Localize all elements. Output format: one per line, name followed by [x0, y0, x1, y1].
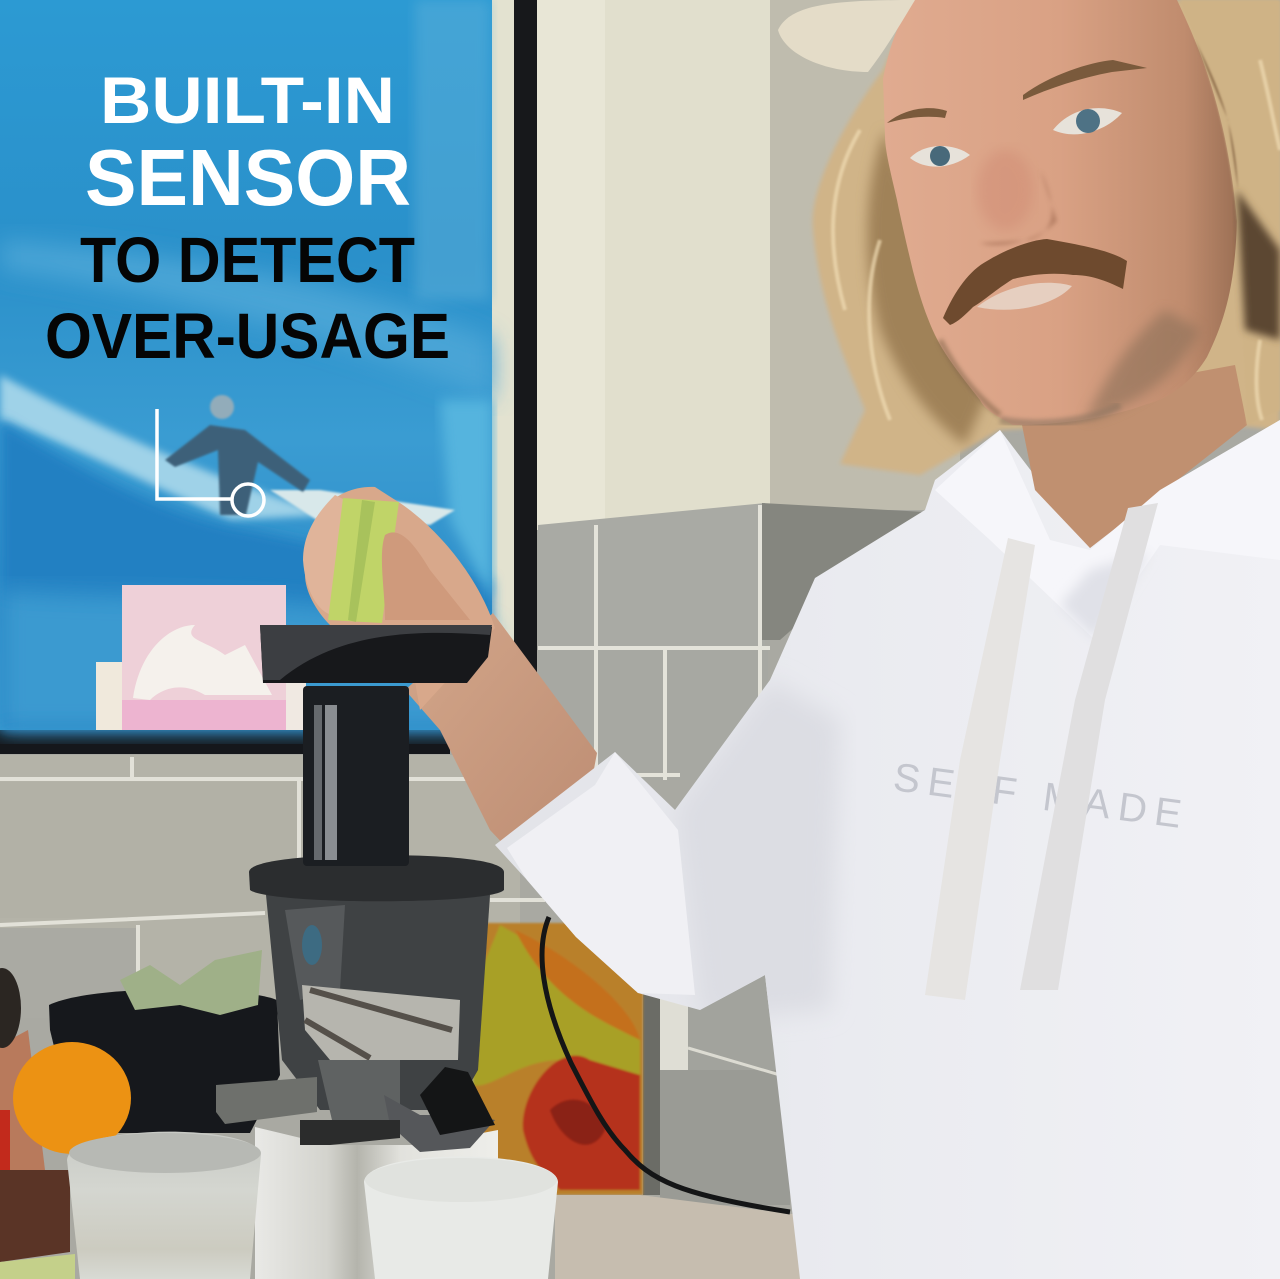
eyes [910, 146, 970, 167]
title text [45, 63, 450, 372]
hoodie body [495, 420, 1280, 1279]
neck [1018, 365, 1247, 548]
title text: OVER-USAGE [45, 300, 450, 372]
drawstrings [925, 538, 1035, 1000]
counter items: plant, fruit, painting [0, 923, 800, 1279]
sleeve shading [684, 692, 837, 1012]
title text: BUILT-IN [100, 63, 395, 137]
hoodie text: SELF MADE [891, 755, 1184, 837]
hair back [813, 0, 1280, 475]
countertop [555, 1195, 800, 1279]
pulp cap [420, 1067, 495, 1135]
surfer [165, 395, 310, 515]
title text: SENSOR [85, 133, 411, 222]
mouth [977, 283, 1072, 310]
right hair [1180, 0, 1280, 425]
nose bridge colour [977, 150, 1033, 230]
hoodie hood collar [935, 420, 1280, 640]
brows [887, 108, 947, 123]
cap [778, 0, 915, 72]
orange [13, 1042, 131, 1154]
person back layers [303, 0, 1280, 848]
poster in black frame [0, 0, 537, 754]
title text: TO DETECT [80, 224, 415, 296]
sleeve cuff [507, 752, 695, 995]
mustache [943, 239, 1127, 325]
power cord [542, 917, 790, 1212]
hair strands [833, 60, 1280, 420]
celery [328, 498, 399, 623]
plant pot [49, 950, 280, 1133]
wall switch [660, 990, 688, 1070]
juicer [216, 625, 504, 1279]
logo panel [96, 585, 306, 730]
juicer base [255, 1127, 498, 1279]
juicer lid [249, 855, 504, 901]
fruit bowl [0, 968, 131, 1279]
juice spout [216, 1077, 317, 1124]
pusher top [260, 625, 492, 683]
thumb [382, 532, 470, 620]
feed chute [303, 686, 409, 866]
painting [473, 923, 643, 1195]
icon: sensor callout line [157, 409, 264, 516]
forearm and hand [303, 487, 597, 848]
surfboard [270, 490, 455, 525]
hood shadow [1060, 552, 1150, 640]
tiled backsplash [0, 503, 925, 1205]
person [495, 0, 1280, 1279]
face [883, 0, 1237, 425]
juicer bowl [266, 895, 490, 1110]
nose shadow [980, 170, 1057, 245]
beard [1085, 310, 1200, 420]
cups [67, 1132, 558, 1279]
